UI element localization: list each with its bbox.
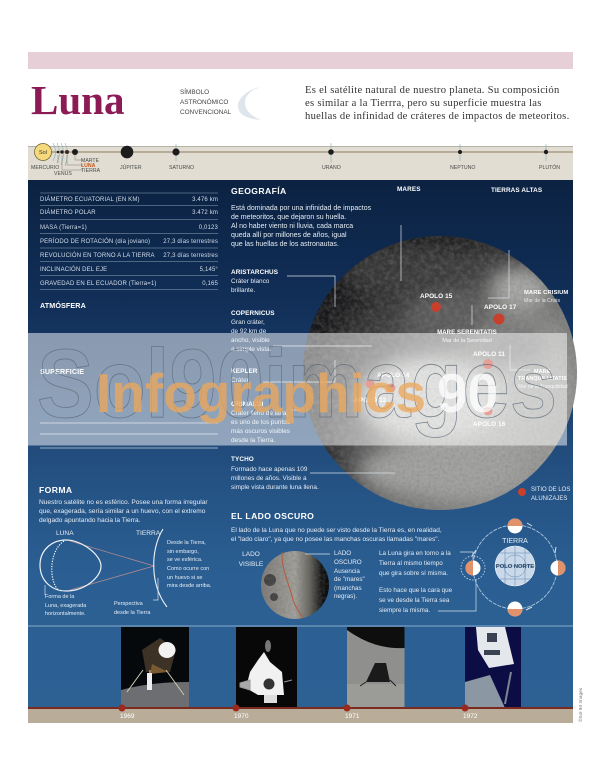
orbit diagram [461, 518, 566, 617]
crater labels: simple vista durante luna llena. [231, 484, 319, 491]
solar system scale [28, 143, 573, 180]
moon labels: APOLO 16 [473, 421, 506, 428]
intro text: huellas de infinidad de cráteres de impactos de meteoritos. [305, 111, 570, 122]
panel: el lado oscuro: LADO [334, 550, 351, 557]
data table: 27,3 días terrestres [163, 253, 218, 259]
crater labels: más oscuros visibles [231, 428, 290, 435]
panel: el lado oscuro: Tierra al mismo tiempo [379, 560, 443, 567]
geography text: que las huellas de los astronautas. [231, 241, 339, 248]
moon illustration [300, 230, 585, 515]
panel: el lado oscuro: (manchas [334, 585, 362, 592]
timeline: 1971 [345, 713, 360, 720]
geography text: de meteoritos, que dejaron su huella. [231, 214, 346, 221]
title: Luna [31, 77, 124, 123]
main blue panel [28, 180, 573, 708]
data table: INCLINACIÓN DEL EJE [40, 266, 107, 273]
panel: forma: Luna, exagerada [45, 603, 87, 609]
moon labels: MARE CRISIUM [524, 290, 568, 296]
timeline: 1972 [463, 713, 478, 720]
leader lines [263, 225, 530, 473]
moon labels: APOLO 11 [473, 351, 505, 358]
panel: forma: Como ocurre con [167, 566, 209, 572]
panel: forma: Desde la Tierra, [167, 540, 206, 546]
crater labels: a simple vista. [231, 346, 272, 353]
panel: el lado oscuro: Esto hace que la cara que [379, 587, 453, 594]
panel: el lado oscuro: se ve desde la Tierra sea [379, 597, 450, 604]
moon labels: Mar de la Serenidad [442, 338, 492, 344]
panel: el lado oscuro: El lado de la Luna que no puede ser visto desde la Tierra es, en realidad, [231, 527, 442, 534]
heading: superficie: SUPERFICIE [40, 367, 84, 376]
solar system scale: TIERRA [81, 168, 101, 174]
crater labels: KEPLER [231, 368, 258, 375]
data table: REVOLUCIÓN EN TORNO A LA TIERRA [40, 252, 155, 259]
geography text: GEOGRAFÍA [231, 186, 287, 196]
photo 1971 [347, 627, 404, 708]
moon labels: MARES [397, 186, 421, 193]
crater labels: GRIMALDI [231, 401, 264, 408]
data table: 5,145° [200, 267, 218, 273]
intro text: es similar a la Tierrra, pero su superficie muestra las [305, 98, 542, 109]
data table: 3.476 km [192, 197, 218, 203]
data table: 3.472 km [192, 210, 218, 216]
intro text: Es el satélite natural de nuestro planeta. Su composición [305, 85, 560, 96]
crater labels: COPERNICUS [231, 310, 275, 317]
panel: forma: delgado apuntando hacia la Tierra. [39, 517, 141, 524]
header band [28, 52, 573, 69]
orbit diagram: TIERRA [502, 538, 528, 545]
solar system scale: MARTE [81, 158, 100, 164]
solar system scale: MERCURIO [31, 165, 59, 171]
credit: ©Sol 90 Images [577, 687, 584, 722]
moon labels: TRANQUILLITATIS [518, 376, 567, 382]
data table: 0,165 [202, 281, 219, 287]
geography text: Está dominada por una infinidad de impactos [231, 205, 372, 212]
moon labels: APOLO 14 [377, 372, 410, 379]
moon labels: APOLO 15 [420, 293, 453, 300]
astronomical symbol [180, 87, 261, 120]
panel: forma: Forma de la [45, 594, 75, 600]
crater labels: Cráter blanco [231, 278, 270, 285]
intro text [305, 85, 570, 122]
geography text: Al no haber viento ni lluvia, cada marca [231, 223, 353, 230]
solar system scale: JÚPITER [120, 164, 142, 171]
data table: DIÁMETRO POLAR [40, 209, 96, 216]
moon labels: APOLO 17 [484, 304, 517, 311]
solar system scale: PLUTÓN [539, 164, 560, 171]
astronomical symbol: SÍMBOLO [180, 87, 209, 96]
timeline [28, 704, 573, 723]
panel: forma: TIERRA [136, 530, 161, 537]
crater labels: Formado hace apenas 109 [231, 466, 308, 473]
crater labels: Gran cráter, [231, 319, 265, 326]
legend: landing sites: ALUNIZAJES [531, 496, 567, 502]
heading: atmósfera: ATMÓSFERA [40, 301, 86, 310]
data table: 27,3 días terrestres [163, 239, 218, 245]
panel: el lado oscuro: negras). [334, 593, 357, 600]
crater labels: de 92 km de [231, 328, 267, 335]
panel: forma: un huevo si se [167, 575, 202, 581]
timeline: 1970 [234, 713, 249, 720]
panel: forma: sin embargo, [167, 549, 199, 555]
panel: el lado oscuro: OSCURO [334, 559, 362, 566]
crater labels: ancho, visible [231, 337, 270, 344]
sun [34, 144, 52, 160]
crater labels: brillante. [231, 287, 255, 294]
moon labels: TIERRAS ALTAS [491, 187, 543, 194]
panel: el lado oscuro: siempre la misma. [379, 607, 430, 614]
panel: el lado oscuro: LADO [242, 551, 260, 558]
astronomical symbol: ASTRONÓMICO [180, 97, 228, 106]
crater labels: es uno de los puntos [231, 419, 290, 426]
data table: PERÍODO DE ROTACIÓN (día joviano) [40, 238, 150, 245]
panel: el lado oscuro: Ausencia [334, 568, 360, 575]
solar system scale: VENUS [54, 171, 72, 177]
panel: forma: desde la Tierra [114, 610, 151, 616]
panel: forma: mira desde arriba. [167, 583, 212, 589]
orbit diagram: POLO NORTE [496, 564, 534, 570]
data table: GRAVEDAD EN EL ECUADOR (Tierra=1) [40, 281, 157, 287]
data table [40, 193, 219, 290]
moon labels: MARE [534, 369, 551, 375]
crater labels: Cráter lleno de lava, [231, 410, 288, 417]
sun: Sol [39, 150, 47, 156]
panel: forma [39, 485, 212, 617]
solar system scale: URANO [322, 165, 341, 171]
moon labels: MARE SERENITATIS [437, 330, 497, 336]
panel: forma: LUNA [56, 530, 74, 537]
panel: forma: FORMA [39, 485, 73, 495]
solar system scale: LUNA [81, 163, 96, 169]
panel: el lado oscuro [231, 511, 476, 620]
solar system scale: NEPTUNO [450, 165, 475, 171]
photo 1969 [121, 627, 189, 708]
watermark: Infographics [96, 362, 426, 424]
crater labels: TYCHO [231, 456, 254, 463]
crater labels: desde la Tierra. [231, 437, 275, 444]
data table: 0,0123 [199, 225, 218, 231]
divider [28, 625, 573, 627]
astronomical symbol: CONVENCIONAL [180, 109, 232, 116]
panel: el lado oscuro: La Luna gira en torno a la [379, 550, 451, 557]
moon labels [354, 186, 568, 428]
panel: el lado oscuro: el "lado claro", ya que no posee las manchas oscuras llamadas "mares". [231, 536, 440, 543]
crater labels [231, 269, 319, 491]
moon labels: Mar de la Tranquilidad [518, 384, 568, 390]
geography text: queda allí por millones de años, igual [231, 232, 347, 239]
panel: forma: horizontalmente. [45, 611, 86, 617]
panel: el lado oscuro: de "mares" [334, 576, 365, 583]
data table: DIÁMETRO ECUATORIAL (EN KM) [40, 196, 140, 203]
panel: el lado oscuro: que gira sobre sí misma. [379, 570, 448, 577]
crater labels: Cráter. [231, 377, 250, 384]
timeline: 1969 [120, 713, 135, 720]
heading: superficie [40, 367, 218, 448]
panel: forma: Perspectiva [114, 601, 144, 607]
panel: el lado oscuro: VISIBLE [239, 561, 264, 568]
far side moon [260, 550, 330, 620]
solar system scale: SATURNO [169, 165, 194, 171]
panel: forma: se ve esférica. [167, 557, 203, 563]
legend: landing sites: SITIO DE LOS [531, 487, 570, 493]
watermark: 90 [437, 362, 498, 424]
crater labels: millones de años. Visible a [231, 475, 307, 482]
geography text [231, 186, 372, 248]
panel: forma: Nuestro satélite no es esférico. Posee una forma irregular [39, 499, 208, 506]
panel: el lado oscuro: EL LADO OSCURO [231, 511, 314, 521]
crater labels: ARISTARCHUS [231, 269, 279, 276]
moon labels: APOLO 12 [354, 397, 387, 404]
photo 1970 [236, 627, 297, 708]
legend: landing sites [518, 487, 570, 502]
panel: forma: que, exagerada, sería similar a un huevo, con el extremo [39, 508, 206, 515]
data table: MASA (Tierra=1) [40, 225, 87, 231]
moon labels: Mar de la Crisis [524, 298, 560, 304]
photo 1972 [465, 627, 521, 708]
